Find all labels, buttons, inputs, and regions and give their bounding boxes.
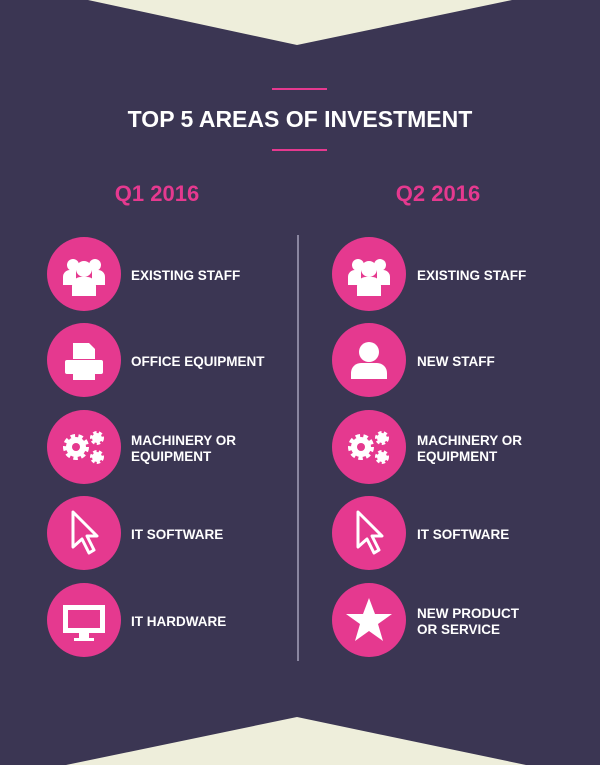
text: OR SERVICE: [417, 622, 500, 637]
heading Q1: Q1 2016: [115, 181, 199, 206]
icon: gears: [47, 410, 121, 484]
text: IT SOFTWARE: [417, 527, 509, 542]
icon: monitor: [47, 583, 121, 657]
icon: cursor: [332, 496, 406, 570]
text: EXISTING STAFF: [417, 268, 526, 283]
heading Q2: Q2 2016: [396, 181, 480, 206]
icon: staff: [47, 237, 121, 311]
text: [131, 433, 236, 464]
icon: gears: [332, 410, 406, 484]
text: EQUIPMENT: [417, 449, 497, 464]
icon: printer: [47, 323, 121, 397]
title: TOP 5 AREAS OF INVESTMENT: [128, 106, 472, 132]
icon: star: [332, 583, 406, 657]
text: MACHINERY OR: [417, 433, 522, 448]
text: MACHINERY OR: [131, 433, 236, 448]
text: NEW PRODUCT: [417, 606, 519, 621]
text: [417, 433, 522, 464]
text: IT SOFTWARE: [131, 527, 223, 542]
text: OFFICE EQUIPMENT: [131, 354, 265, 369]
text: EQUIPMENT: [131, 449, 211, 464]
icon: cursor: [47, 496, 121, 570]
text: EXISTING STAFF: [131, 268, 240, 283]
text: IT HARDWARE: [131, 614, 226, 629]
text: [417, 606, 519, 637]
icon: staff: [332, 237, 406, 311]
panel: Q2 list: [332, 237, 526, 657]
panel: Q1 list: [47, 237, 265, 657]
icon: person: [332, 323, 406, 397]
text: NEW STAFF: [417, 354, 495, 369]
